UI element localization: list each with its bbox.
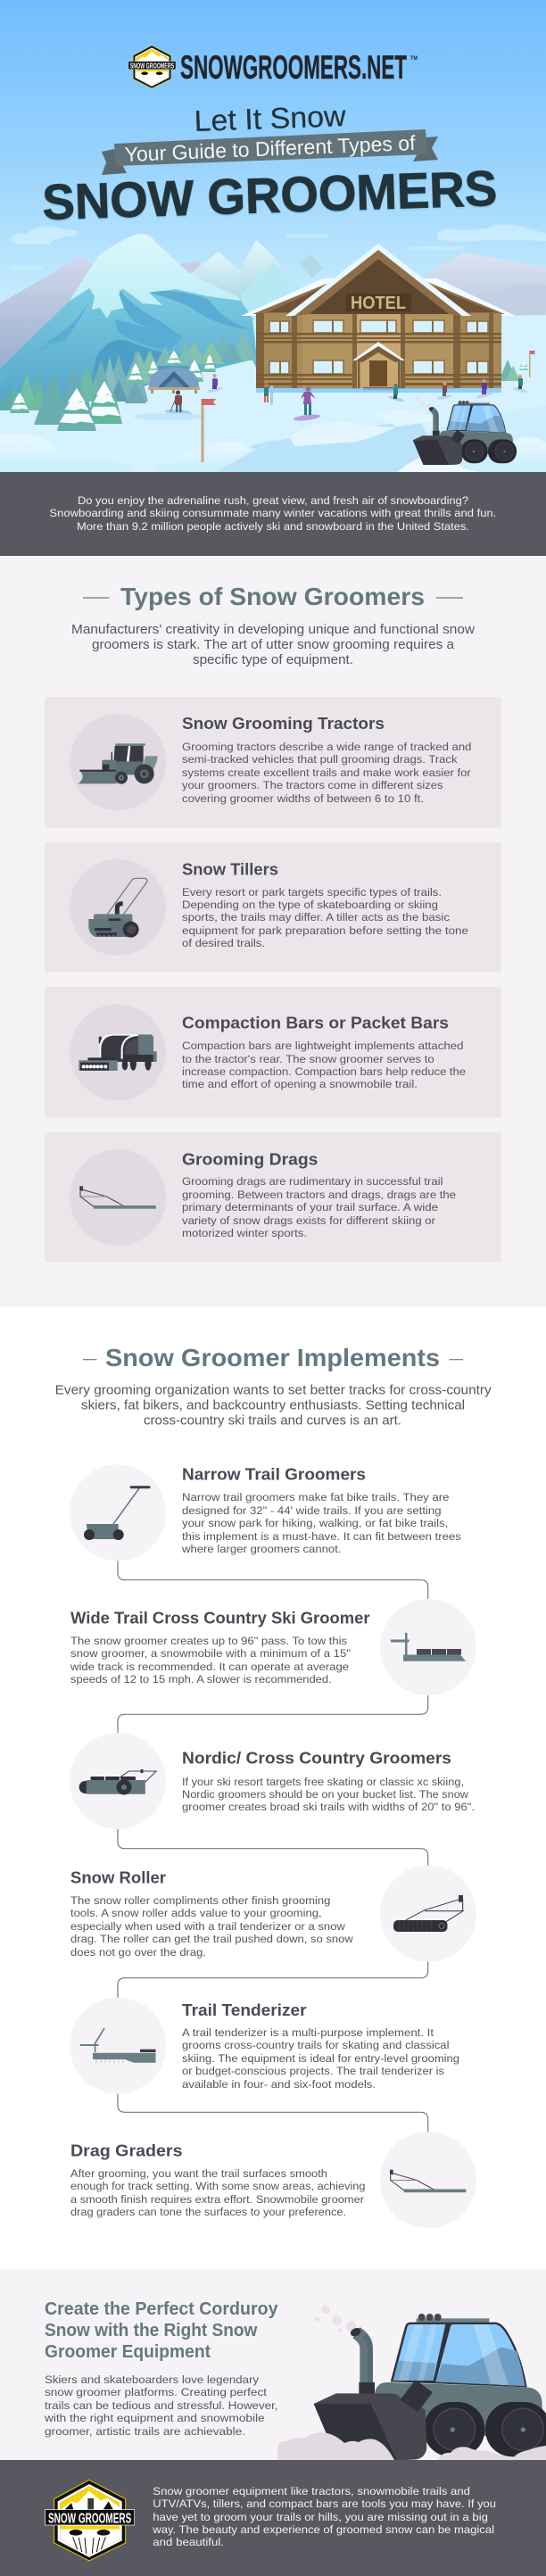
section intro: specific type of equipment. <box>193 653 353 667</box>
footer logo: SNOW GROOMERS <box>48 2511 131 2526</box>
item text: or budget-conscious projects. The trail tenderizer is <box>182 2065 444 2077</box>
footer text: way. The beauty and experience of groomed snow can be magical <box>152 2523 494 2536</box>
item text: available in four- and six-foot models. <box>182 2078 376 2091</box>
item text: skiing. The equipment is ideal for entry-level grooming <box>182 2052 459 2065</box>
card text <box>182 1040 466 1090</box>
item text: drag. The roller can get the trail pushed down, so snow <box>70 1933 353 1945</box>
footer text: and beautiful. <box>153 2536 224 2548</box>
item text: The snow roller compliments other finish grooming <box>70 1894 331 1907</box>
section intro <box>55 1384 492 1429</box>
item text: does not go over the drag. <box>70 1946 206 1959</box>
title: let it snow: Let It Snow <box>194 99 346 137</box>
clouds <box>10 224 546 270</box>
section: corduroy snow <box>0 2269 546 2460</box>
brand logo: SNOW GROOMERS <box>130 62 175 70</box>
section title: Snow with the Right Snow <box>45 2321 258 2340</box>
item text: wide track is recommended. It can operate at average <box>70 1661 349 1673</box>
intro text: Snowboarding and skiing consummate many winter vacations with great thrills and fun. <box>49 507 496 519</box>
item text: where larger groomers cannot. <box>181 1543 341 1555</box>
card text: grooming. Between tractors and drags, drags are the <box>182 1189 456 1201</box>
section: types of snow groomers <box>0 556 546 1307</box>
ribbon <box>102 129 438 175</box>
icon: tenderizer <box>80 2028 155 2063</box>
item text: speeds of 12 to 15 mph. A slower is recommended. <box>70 1673 332 1686</box>
item: trail tenderizer <box>70 1997 459 2093</box>
icon: nordic groomer <box>79 1769 156 1795</box>
item text: If your ski resort targets free skating or classic xc skiing, <box>182 1776 464 1788</box>
item title: Narrow Trail Groomers <box>182 1465 366 1483</box>
item title: Nordic/ Cross Country Groomers <box>182 1750 451 1768</box>
card text: Compaction bars are lightweight implements attached <box>182 1040 464 1052</box>
hero panel <box>0 0 546 473</box>
card text: Grooming drags are rudimentary in successful trail <box>182 1175 443 1188</box>
intro text: More than 9.2 million people actively ski and snowboard in the United States. <box>77 520 469 533</box>
item text <box>70 1894 353 1959</box>
intro band <box>0 472 546 556</box>
item text: groomer creates broad ski trails with widths of 20" to 96". <box>182 1801 475 1813</box>
card text: Every resort or park targets specific types of trails. <box>182 886 442 899</box>
brand name: SNOWGROOMERS.NET <box>180 49 407 86</box>
item text: designed for 32" - 44' wide trails. If you are setting <box>182 1504 442 1517</box>
intro text: Do you enjoy the adrenaline rush, great view, and fresh air of snowboarding? <box>78 494 468 507</box>
section text <box>44 2373 277 2438</box>
section intro: Manufacturers' creativity in developing unique and functional snow <box>71 623 475 637</box>
card text <box>182 1175 456 1239</box>
heading: Snow Groomer Implements <box>105 1344 440 1371</box>
snow clouds <box>277 2432 546 2460</box>
card text: Depending on the type of skateboarding or skiing <box>182 899 438 911</box>
item text: tools. A snow roller adds value to your grooming, <box>70 1907 322 1919</box>
item text <box>181 1491 461 1555</box>
section intro <box>71 623 475 667</box>
item title: Trail Tenderizer <box>182 2001 307 2019</box>
flag <box>202 399 216 462</box>
item text: snow groomer, a snowmobile with a minimum of a 15" <box>70 1647 351 1660</box>
footer band <box>0 2460 546 2576</box>
card title: Grooming Drags <box>182 1151 318 1169</box>
icon: roller <box>393 1895 463 1932</box>
item text <box>182 1776 475 1813</box>
card text: systems create excellent trails and make work easier for <box>182 766 471 779</box>
icon: large groomer <box>314 2306 546 2460</box>
item: nordic cross country groomers <box>70 1733 475 1829</box>
icon: tiller <box>88 878 147 938</box>
item: snow roller <box>70 1865 476 1961</box>
card text: your groomers. The tractors come in different sizes <box>182 779 443 791</box>
item: wide trail cross country ski groomer <box>70 1599 476 1695</box>
item text: drag graders can tone the surfaces to your preference. <box>70 2206 346 2218</box>
card text: motorized winter sports. <box>182 1227 307 1239</box>
card title: Snow Grooming Tractors <box>182 715 385 733</box>
item text <box>70 1635 351 1686</box>
dome tent <box>148 368 200 393</box>
footer text: UTV/ATVs, tillers, and compact bars are tools you may have. If you <box>153 2497 496 2510</box>
card text: primary determinants of your trail surface. A wide <box>182 1201 438 1213</box>
item text: Narrow trail groomers make fat bike trails. They are <box>182 1491 450 1503</box>
item: narrow trail groomers <box>70 1464 461 1561</box>
brand logo <box>128 46 176 88</box>
small flag <box>529 351 535 377</box>
section intro: skiers, fat bikers, and backcountry enthusiasts. Setting technical <box>81 1399 465 1413</box>
card text: variety of snow drags exists for different skiing or <box>182 1214 435 1227</box>
section title: Groomer Equipment <box>45 2342 211 2362</box>
section text: snow groomer platforms. Creating perfect <box>45 2386 268 2398</box>
item text: a smooth finish requires extra effort. Snowmobile groomer <box>70 2193 364 2206</box>
card text: sports, the trails may differ. A tiller acts as the basic <box>182 911 450 924</box>
section text: groomer, artistic trails are achievable. <box>45 2425 245 2438</box>
icon: hero groomer <box>413 397 517 465</box>
section text: trails can be tedious and stressful. However, <box>45 2399 278 2412</box>
connector lines <box>118 1561 428 2133</box>
card text: to the tractor's rear. The snow groomer serves to <box>182 1053 434 1065</box>
card title: Compaction Bars or Packet Bars <box>182 1015 449 1032</box>
section text: with the right equipment and snowmobile <box>44 2412 265 2424</box>
card text: time and effort of opening a snowmobile trail. <box>182 1078 418 1090</box>
item text: this implement is a must-have. It can fit between trees <box>182 1530 461 1543</box>
card text: increase compaction. Compaction bars help reduce the <box>182 1065 466 1078</box>
card: grooming drags <box>45 1132 501 1263</box>
ribbon text: Your Guide to Different Types of <box>124 131 417 166</box>
item text: enough for track setting. With some snow areas, achieving <box>70 2180 366 2192</box>
hotel <box>241 244 516 393</box>
footer text: have yet to groom your trails or hills, you are missing out in a big <box>153 2511 488 2523</box>
item title: Snow Roller <box>70 1869 166 1887</box>
card text: covering groomer widths of between 6 to 10 ft. <box>182 792 424 805</box>
section title <box>45 2299 278 2362</box>
icon: compaction groomer <box>79 1034 157 1071</box>
item text: your snow park for hiking, walking, or fat bike trails, <box>182 1517 448 1529</box>
title: snow groomers: SNOW GROOMERS <box>41 160 498 230</box>
item text <box>182 2026 459 2091</box>
section intro: groomers is stark. The art of utter snow grooming requires a <box>92 638 455 652</box>
footer text: Snow groomer equipment like tractors, snowmobile trails and <box>153 2485 470 2497</box>
item text: After grooming, you want the trail surfaces smooth <box>70 2167 327 2180</box>
item title: Wide Trail Cross Country Ski Groomer <box>70 1609 369 1627</box>
intro text <box>49 494 496 533</box>
section text: Skiers and skateboarders love legendary <box>45 2373 260 2386</box>
card: snow tillers <box>45 842 501 973</box>
icon: narrow groomer <box>84 1486 151 1540</box>
heading: Types of Snow Groomers <box>120 583 425 610</box>
hotel sign: HOTEL <box>351 294 406 313</box>
section: snow groomer implements <box>0 1307 546 2269</box>
back mountains <box>0 240 546 393</box>
trademark: TM <box>410 56 418 62</box>
item text: Nordic groomers should be on your bucket list. The snow <box>182 1788 468 1801</box>
snow ground <box>0 315 546 473</box>
card text <box>182 741 472 805</box>
item text: The snow groomer creates up to 96" pass. To tow this <box>70 1635 347 1647</box>
card: snow grooming tractors <box>45 697 501 828</box>
card text: of desired trails. <box>182 937 265 949</box>
section intro: Every grooming organization wants to set better tracks for cross-country <box>55 1384 492 1398</box>
card text: Grooming tractors describe a wide range of tracked and <box>182 741 472 753</box>
item text: A trail tenderizer is a multi-purpose implement. It <box>182 2026 434 2039</box>
icon: drag grader <box>390 2170 466 2192</box>
main mountain <box>0 234 259 424</box>
footer text <box>152 2485 496 2548</box>
icon: wide groomer <box>391 1633 466 1661</box>
section intro: cross-country ski trails and curves is an art. <box>144 1414 401 1429</box>
footer logo <box>46 2480 135 2561</box>
card text <box>182 886 468 949</box>
snow drifts and trail <box>0 406 546 473</box>
card: compaction bars <box>45 987 501 1118</box>
item title: Drag Graders <box>70 2142 182 2160</box>
card text: equipment for park preparation before setting the tone <box>182 924 468 937</box>
section title: Create the Perfect Corduroy <box>45 2299 278 2319</box>
people on the snow <box>165 374 527 422</box>
card text: semi-tracked vehicles that pull grooming drags. Track <box>182 753 458 766</box>
item: drag graders <box>70 2132 476 2228</box>
icon: tractor <box>78 743 158 784</box>
icon: drag <box>79 1186 156 1209</box>
item text <box>70 2167 366 2218</box>
trees <box>0 330 528 431</box>
item text: especially when used with a trail tenderizer or a snow <box>70 1920 345 1933</box>
item text: grooms cross-country trails for skating and classical <box>182 2039 450 2051</box>
card title: Snow Tillers <box>182 861 278 879</box>
